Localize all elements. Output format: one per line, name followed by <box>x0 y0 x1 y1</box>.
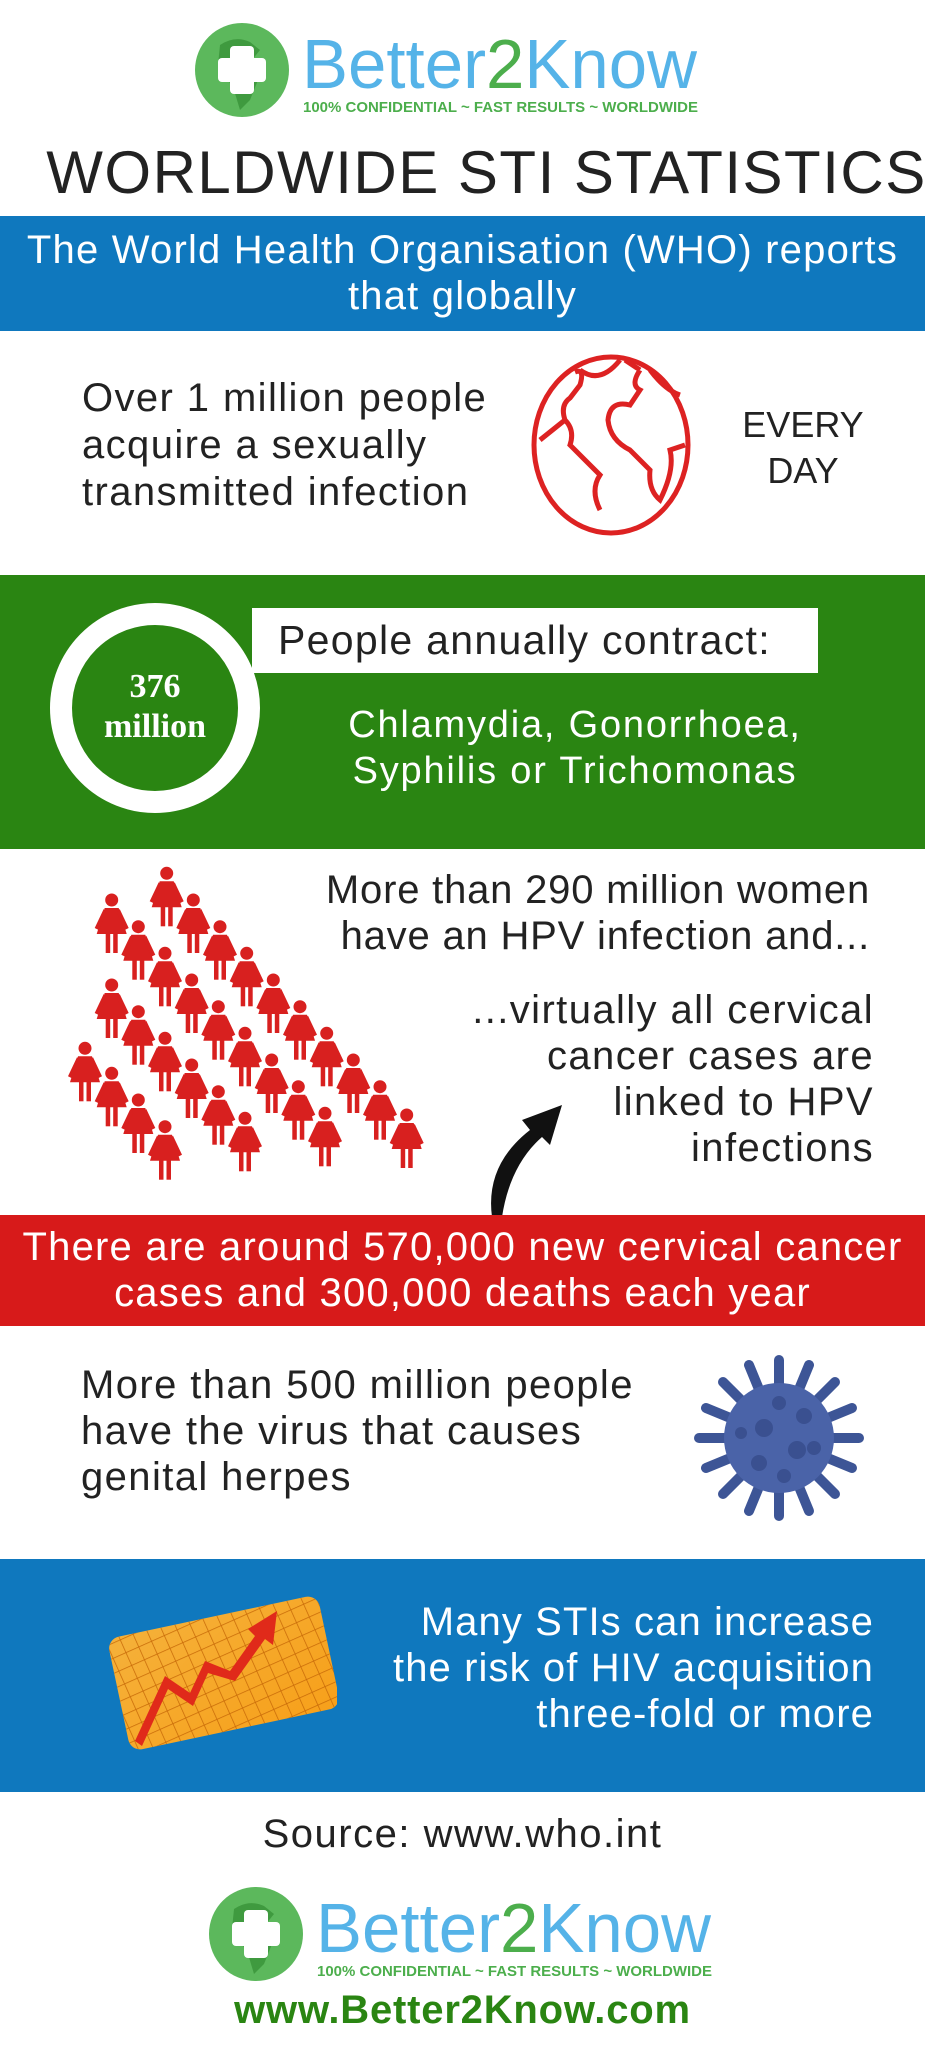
icon: globe <box>532 354 690 536</box>
text: herpes: genital herpes <box>81 1455 352 1499</box>
logo: bottom <box>209 1887 712 1981</box>
icon: rising chart <box>109 1596 337 1750</box>
text: every day <box>742 404 864 491</box>
text: cervical cancer link <box>472 988 874 1170</box>
logo: bottom: 100% CONFIDENTIAL ~ FAST RESULTS ~ WORLDWIDE <box>317 1963 712 1980</box>
badge: 376 million <box>50 603 260 813</box>
title: WORLDWIDE STI STATISTICS <box>46 139 925 206</box>
label bar <box>252 608 818 673</box>
banner: WHO intro: that globally <box>348 274 577 318</box>
logo: top <box>195 23 698 117</box>
icon: virus <box>694 1355 864 1521</box>
panel: HIV risk <box>0 1559 925 1792</box>
text: herpes <box>81 1363 634 1499</box>
text: over 1 million <box>82 376 487 514</box>
banner: cervical cancer stats: There are around 570,000 new cervical cancer <box>23 1225 902 1269</box>
text: over 1 million: transmitted infection <box>82 470 469 514</box>
text: HIV risk: three-fold or more <box>536 1692 874 1736</box>
text: diseases <box>348 704 802 792</box>
text: every day: DAY <box>767 450 839 491</box>
text: over 1 million: Over 1 million people <box>82 376 487 420</box>
icon: women figures <box>68 866 424 1180</box>
panel: 376 million <box>0 575 925 849</box>
text: herpes: have the virus that causes <box>81 1409 582 1453</box>
text: 290 million women: More than 290 million women <box>326 868 870 912</box>
logo: top: 100% CONFIDENTIAL ~ FAST RESULTS ~ WORLDWIDE <box>303 99 698 116</box>
badge: 376 million: million <box>104 708 206 745</box>
badge: 376 million: 376 <box>130 668 180 705</box>
logo: top: Better2Know <box>302 25 697 103</box>
text: cervical cancer link: cancer cases are <box>547 1034 874 1078</box>
text: cervical cancer link: ...virtually all cervical <box>472 988 874 1032</box>
banner: cervical cancer stats: cases and 300,000 deaths each year <box>114 1271 811 1315</box>
text: 290 million women <box>326 868 870 958</box>
arrow: curved black <box>491 1105 562 1215</box>
banner: WHO intro <box>0 216 925 331</box>
text: 290 million women: have an HPV infection and... <box>341 914 870 958</box>
text: HIV risk: Many STIs can increase <box>421 1600 874 1644</box>
text: source: Source: www.who.int <box>263 1812 662 1856</box>
text: every day: EVERY <box>742 404 864 445</box>
text: HIV risk <box>393 1600 874 1736</box>
text: cervical cancer link: linked to HPV <box>613 1080 874 1124</box>
text: diseases: Syphilis or Trichomonas <box>353 750 797 792</box>
text: herpes: More than 500 million people <box>81 1363 634 1407</box>
text: cervical cancer link: infections <box>691 1126 874 1170</box>
label bar: People annually contract: <box>278 617 771 663</box>
text: website: www.Better2Know.com <box>234 1988 691 2032</box>
text: over 1 million: acquire a sexually <box>82 423 427 467</box>
text: diseases: Chlamydia, Gonorrhoea, <box>348 704 802 746</box>
banner: cervical cancer stats <box>0 1215 925 1326</box>
banner: WHO intro: The World Health Organisation (WHO) reports <box>27 228 898 272</box>
text: HIV risk: the risk of HIV acquisition <box>393 1646 874 1690</box>
logo: bottom: Better2Know <box>316 1889 711 1967</box>
